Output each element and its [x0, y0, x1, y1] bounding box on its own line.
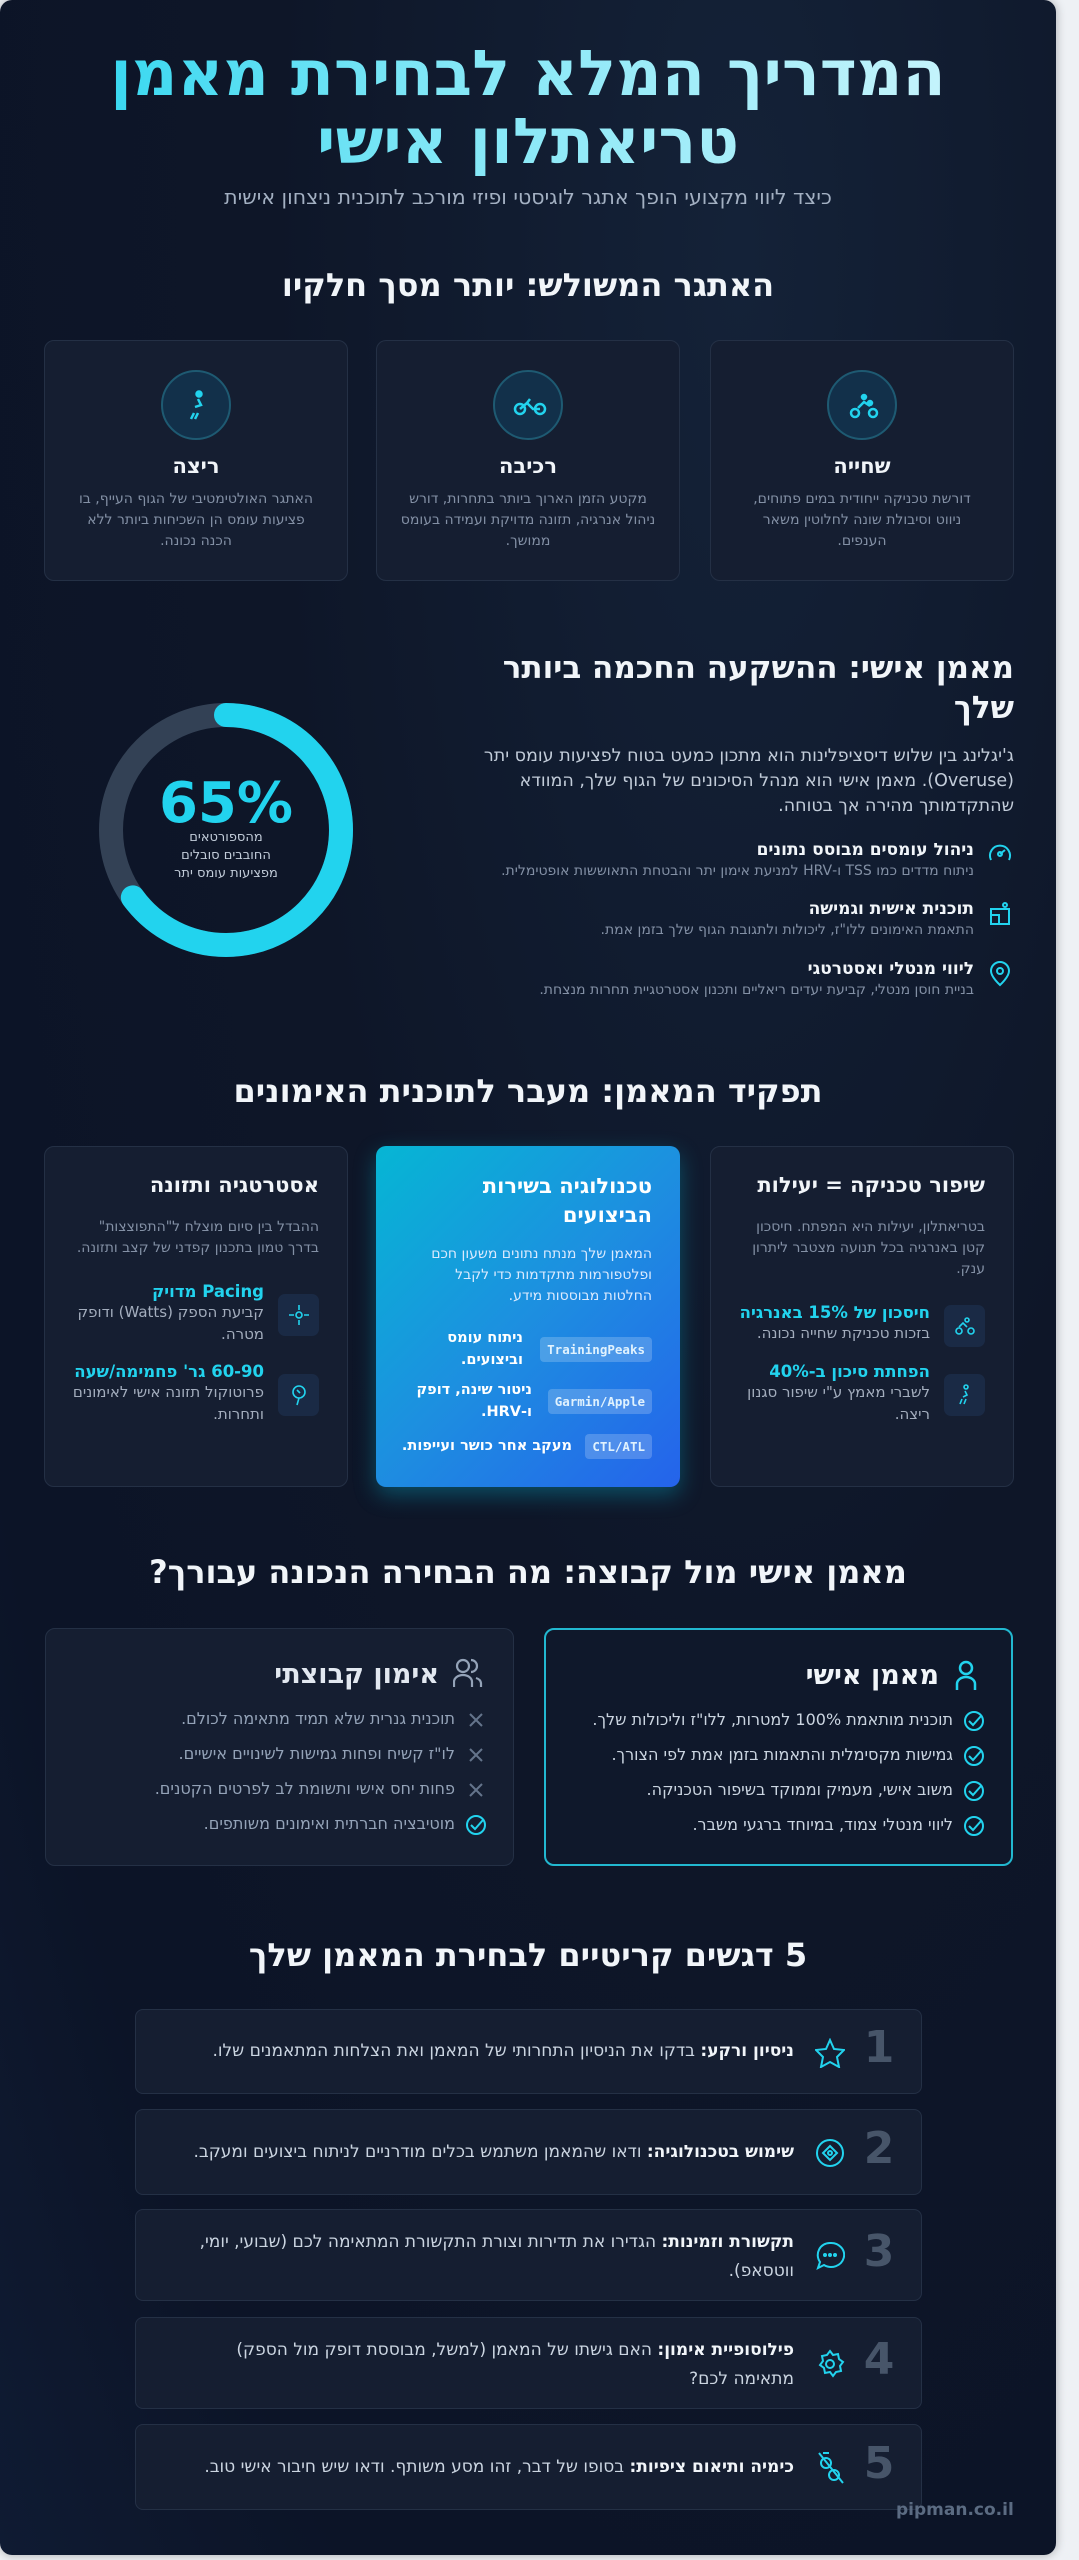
panel: bike [376, 340, 680, 581]
tag: CTL/ATL: CTL/ATL [592, 1439, 645, 1454]
panel: strategy & nutrition [44, 1146, 348, 1487]
panel: technology (highlighted): ניטור שינה, דופק ו-HRV. [416, 1382, 532, 1420]
heading: personal coach investment: מאמן אישי: ההשקעה החכמה ביותר שלך [503, 650, 1014, 726]
panel: technique [710, 1146, 1014, 1487]
row 2: 2 [864, 2123, 894, 2174]
feature: mental guidance: ליווי מנטלי ואסטרטגי [808, 959, 974, 979]
list: personal pros [592, 1710, 984, 1836]
row 1: ניסיון ורקע: בדקו את הניסיון התחרותי של המאמן ואת הצלחות המתאמנים שלו. [212, 2041, 794, 2061]
panel: technology (highlighted): המאמן שלך מנתח נתונים משעון חכם ופלטפורמות מתקדמות כדי לקבל החלטות מבוססות מידע. [431, 1246, 652, 1304]
card title: שחייה [833, 454, 891, 478]
item: risk reduction: הפחתת סיכון ב-40% [769, 1362, 930, 1381]
panel: strategy & nutrition: אסטרטגיה ותזונה [150, 1173, 319, 1197]
row 1 [135, 2009, 922, 2094]
item: energy saving: חיסכון של 15% באנרגיה [740, 1303, 930, 1322]
list: personal pros: תוכנית מותאמת 100% למטרות, ללו"ז וליכולות שלך. [592, 1710, 953, 1729]
item: pacing: קביעת הספק (Watts) ודופק מטרה. [77, 1303, 264, 1343]
icon: swim [827, 370, 897, 440]
item: energy saving: בזכות טכניקת שחייה נכונה. [757, 1324, 930, 1342]
icon: group [453, 1658, 482, 1687]
row 4: פילוסופיית אימון: האם גישתו של המאמן (למשל, מבוססת דופק מול הספק) מתאימה לכם? [236, 2340, 794, 2389]
row 4: 4 [864, 2334, 894, 2385]
panel: strategy & nutrition: ההבדל בין סיום מוצלח ל"התפוצצות" בדרך טמון בתכנון קפדני של קצב ותזונה. [77, 1219, 319, 1256]
card title: ריצה [173, 454, 219, 478]
list: personal pros: ליווי מנטלי צמוד, במיוחד ברגעי משבר. [692, 1815, 953, 1834]
feature: mental guidance: בניית חוסן מנטלי, קביעת יעדים ריאליים ותכנון אסטרטגיית תחרות מנצחת. [539, 982, 974, 998]
stat caption: מהספורטאים [189, 830, 263, 845]
feature: load management: ניתוח מדדים כמו TSS ו-HRV למניעת אימון יתר והבטחת התאוששות אופטימלית. [501, 863, 974, 879]
panel: technology (highlighted) [376, 1146, 680, 1487]
tag: CTL/ATL [585, 1434, 652, 1459]
panel: technology (highlighted): מעקב אחר כושר ועייפות. [402, 1438, 572, 1454]
row 3 [135, 2209, 922, 2301]
item: pacing: Pacing מדויק [152, 1282, 264, 1301]
item: energy saving [740, 1303, 985, 1347]
row 4 [135, 2317, 922, 2409]
icon: chemistry [818, 2452, 844, 2484]
row 1: 1 [864, 2022, 894, 2073]
feature: personal plan: התאמת האימונים ללו"ז, ליכולות ולתגובת הגוף שלך בזמן אמת. [601, 922, 974, 938]
row 5 [135, 2424, 922, 2510]
icon: chat [816, 2242, 845, 2270]
title: טריאתלון אישי [317, 105, 739, 178]
list: group cons/pros [155, 1709, 486, 1835]
feature: load management [501, 840, 1012, 879]
feature: personal plan [601, 899, 1010, 938]
paragraph: overuse: ג'יגלינג בין שלוש דיסציפלינות הוא מתכון כמעט בטוח לפציעות עומס יתר (Overuse). מאמן אישי הוא מנהל הסיכונים של הגוף שלך, המוודא שהתקדמותך מהירה אך בטוחה. [484, 746, 1014, 816]
icon: star [815, 2038, 845, 2068]
list: group cons/pros: פחות יחס אישי ותשומת לב לפרטים הקטנים. [155, 1779, 455, 1798]
icon: gauge [988, 844, 1012, 860]
title: המדריך המלא לבחירת מאמן [110, 37, 946, 110]
footer: brand: pipman.co.il [896, 2500, 1014, 2520]
row 5: כימיה ותיאום ציפיות: בסופו של דבר, זהו מסע משותף. ודאו שיש חיבור אישי טוב. [204, 2457, 794, 2477]
panel: run [44, 340, 348, 581]
title [0, 40, 1056, 176]
stat caption [174, 830, 278, 881]
panel: technique: שיפור טכניקה = יעילות [757, 1173, 985, 1197]
panel: group training: אימון קבוצתי [274, 1659, 439, 1690]
icon: location [990, 961, 1010, 986]
tag: TrainingPeaks [540, 1337, 652, 1362]
subtitle: כיצד ליווי מקצועי הופך אתגר לוגיסטי ופיזי מורכב לתוכנית ניצחון אישית [224, 185, 832, 209]
row 5: 5 [864, 2438, 894, 2489]
icon: run [161, 370, 231, 440]
stat value: 65% [159, 771, 293, 836]
stat caption: החובבים סובלים [181, 848, 271, 863]
feature: load management: ניהול עומסים מבוסס נתונים [757, 840, 974, 860]
item: carbs [73, 1362, 319, 1423]
stat caption: מפציעות עומס יתר [174, 866, 278, 881]
card title: רכיבה [499, 454, 557, 478]
panel: technology (highlighted): ניתוח עומס וביצועים. [447, 1330, 523, 1368]
panel: technology (highlighted): טכנולוגיה בשירות הביצועים [483, 1174, 652, 1227]
icon: person [956, 1660, 976, 1690]
heading: 5 criteria: 5 דגשים קריטיים לבחירת המאמן שלך [249, 1936, 807, 1974]
icon: bike [493, 370, 563, 440]
heading: triple challenge: האתגר המשולש: יותר מסך חלקיו [282, 266, 774, 304]
item: risk reduction: לשברי מאמץ ע"י שיפור סגנון ריצה. [747, 1383, 930, 1423]
feature: personal plan: תוכנית אישית וגמישה [809, 899, 974, 919]
tag: TrainingPeaks: TrainingPeaks [547, 1342, 645, 1357]
card text: מקטע הזמן הארוך ביותר בתחרות, דורש ניהול אנרגיה, תזונה מדויקת ועמידה בעומס ממושך. [401, 491, 655, 549]
item: carbs: פרוטוקול תזונה אישי לאימונים ותחרות. [73, 1383, 264, 1423]
row 2: שימוש בטכנולוגיה: ודאו שהמאמן משתמש בכלים מודרניים לניתוח ביצועים ומעקב. [193, 2142, 794, 2162]
panel: group training [45, 1628, 514, 1866]
panel: technique: בטריאתלון, יעילות היא המפתח. חיסכון קטן באנרגיה בכל תנועה מצטבר ליתרון ענק. [752, 1219, 985, 1277]
tag: Garmin/Apple: Garmin/Apple [555, 1394, 645, 1409]
feature: mental guidance [539, 959, 1010, 998]
panel: personal coach: מאמן אישי [806, 1660, 939, 1691]
chart: donut 65% [99, 703, 353, 957]
item: risk reduction [747, 1362, 985, 1423]
list: personal pros: גמישות מקסימלית והתאמות בזמן אמת לפי הצורך. [611, 1745, 953, 1764]
item: pacing [77, 1282, 319, 1343]
heading: coach role: תפקיד המאמן: מעבר לתוכנית האימונים [233, 1072, 823, 1110]
icon: tech [816, 2139, 844, 2167]
panel: swim [710, 340, 1014, 581]
panel: personal coach [544, 1628, 1013, 1866]
list: personal pros: משוב אישי, מעמיק וממוקד בשיפור הטכניקה. [647, 1780, 953, 1799]
row 3: 3 [864, 2226, 894, 2277]
list: group cons/pros: מוטיבציה חברתית ואימונים משותפים. [204, 1814, 455, 1833]
icon: plan [990, 902, 1010, 925]
item: carbs: 60-90 גר' פחמימה/שעה [74, 1362, 264, 1381]
card text: דורשת טכניקה ייחודית במים פתוחים, ניווט וסיבולת שונה לחלוטין משאר הענפים. [753, 491, 971, 549]
heading: personal vs group: מאמן אישי מול קבוצה: מה הבחירה הנכונה עבורך? [149, 1553, 907, 1591]
row 3: תקשורת וזמינות: הגדירו את תדירות וצורת התקשורת המתאימה לכם (שבועי, יומי, ווטסאפ). [200, 2232, 794, 2281]
list: group cons/pros: לו"ז קשיח ופחות גמישות לשינויים אישיים. [179, 1744, 455, 1763]
card text: האתגר האולטימטיבי של הגוף העייף, בו פציעות עומס הן השכיחות ביותר ללא הכנה נכונה. [79, 491, 313, 549]
icon: gear [818, 2350, 844, 2378]
tag: Garmin/Apple [548, 1389, 652, 1414]
list: group cons/pros: תוכנית גנרית שלא תמיד מתאימה לכולם. [181, 1709, 455, 1728]
row 2 [135, 2109, 922, 2195]
